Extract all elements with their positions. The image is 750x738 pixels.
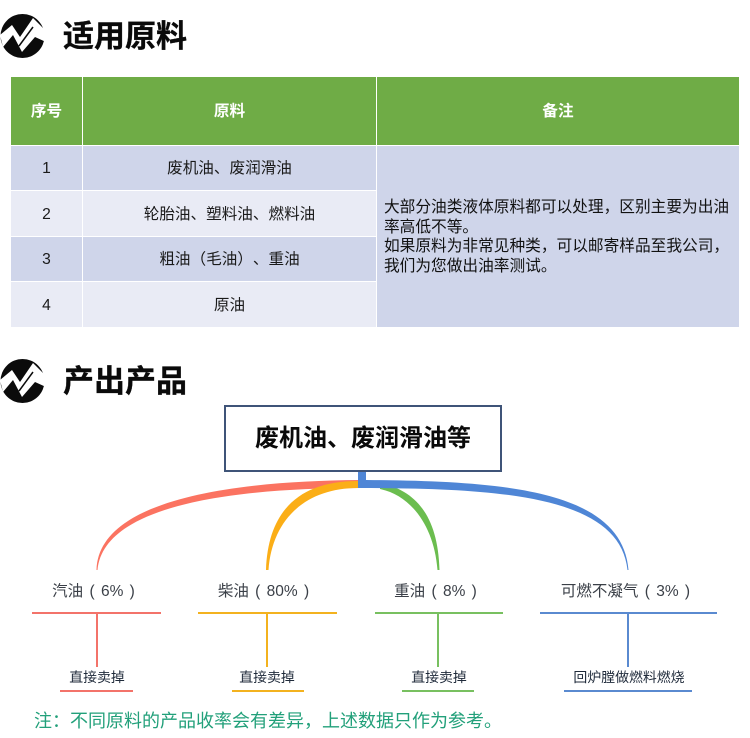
heading: 适用原料: 适用原料: [63, 19, 187, 54]
header: 原料: 原料: [214, 103, 245, 120]
label: 汽油 ( 6% ): [52, 583, 135, 600]
text block: notes: 率高低不等。: [384, 218, 478, 236]
branch: 汽油: [32, 583, 161, 692]
stem: [627, 613, 629, 667]
row 2 material: [83, 191, 376, 236]
heading: 产出产品: 产出产品: [63, 364, 187, 399]
underline: [564, 690, 692, 692]
underline: [402, 690, 474, 692]
label: 可燃不凝气 ( 3% ): [561, 583, 690, 600]
icon: logo top: [0, 14, 44, 58]
label: 重油 ( 8% ): [394, 583, 477, 600]
footnote: 注：不同原料的产品收率会有差异，上述数据只作为参考。: [34, 711, 502, 731]
root box: [224, 405, 502, 472]
row 2 number: 2: [42, 206, 51, 222]
underline: [232, 690, 304, 692]
row 3 material: 粗油（毛油）、重油: [159, 251, 300, 268]
branch: 可燃不凝气: [540, 582, 717, 692]
root box: 废机油、废润滑油等: [255, 424, 471, 452]
underline: [60, 690, 133, 692]
header: 序号: [11, 77, 82, 145]
text block: notes: 如果原料为非常见种类，可以邮寄样品至我公司，: [384, 238, 729, 255]
text block: notes: [384, 198, 729, 274]
row 2 material: 轮胎油、塑料油、燃料油: [144, 206, 315, 222]
row 3 number: 3: [42, 251, 51, 268]
stem: [437, 613, 439, 667]
row 1 number: 1: [42, 160, 51, 177]
branch: 柴油: [198, 582, 337, 692]
row 3 material: [83, 237, 376, 281]
row 4 material: 原油: [214, 296, 245, 314]
curve: green: [380, 483, 440, 570]
icon: logo bottom: [0, 359, 44, 403]
rule: [375, 612, 503, 614]
stem: [96, 613, 98, 667]
curve: orange: [266, 481, 358, 570]
header: 原料: [83, 77, 376, 145]
row 4 number: [11, 282, 82, 327]
table: raw materials: [11, 77, 739, 327]
curve: red: [96, 480, 360, 570]
branch: 重油: [375, 583, 503, 692]
notes cell background: [377, 146, 739, 327]
curve: blue: [358, 472, 628, 570]
header: 序号: 序号: [31, 103, 62, 120]
action text: 直接卖掉: [69, 669, 125, 685]
action text: 回炉膛做燃料燃烧: [573, 669, 685, 685]
label: 柴油 ( 80% ): [218, 583, 309, 600]
header: 备注: 备注: [542, 103, 574, 120]
stem: [266, 613, 268, 667]
text block: notes: 大部分油类液体原料都可以处理，区别主要为出油: [384, 199, 729, 216]
action text: 直接卖掉: [411, 669, 467, 685]
row 3 number: [11, 237, 82, 281]
row 4 material: [83, 282, 376, 327]
row 1 number: [11, 146, 82, 190]
rule: [32, 612, 161, 614]
row 1 material: [83, 146, 376, 190]
rule: [540, 612, 717, 614]
action text: 直接卖掉: [239, 669, 295, 685]
rule: [198, 612, 337, 614]
header: 备注: [377, 77, 739, 145]
row 4 number: 4: [42, 296, 51, 314]
text block: notes: 我们为您做出油率测试。: [384, 258, 557, 274]
row 1 material: 废机油、废润滑油: [167, 160, 292, 177]
row 2 number: [11, 191, 82, 236]
